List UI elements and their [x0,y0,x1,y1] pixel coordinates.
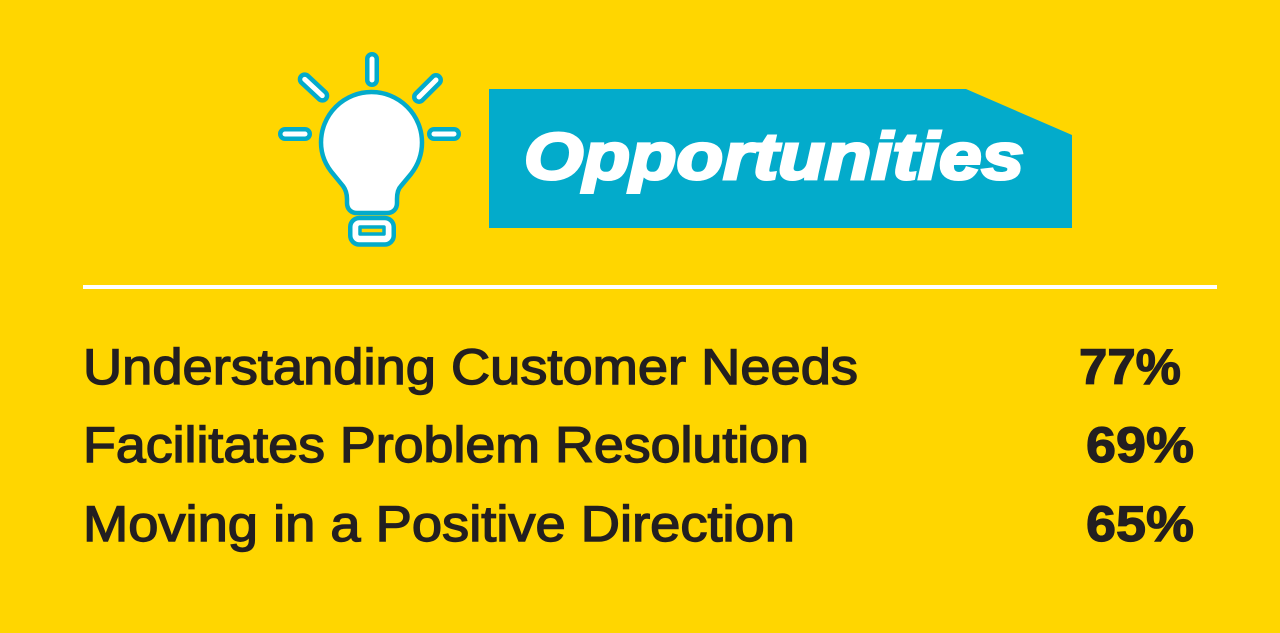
icon: light bulb [280,54,459,244]
heading banner [489,89,1072,228]
row: moving in a positive direction [83,496,1194,552]
icon: left ray [280,129,310,139]
row: facilitates problem resolution [83,417,1194,473]
icon: bulb glass [321,92,422,213]
row label: Understanding Customer Needs [83,339,858,395]
icon: bulb base slot [360,227,384,234]
banner shape [489,89,1072,228]
icon: upper right ray [412,73,443,104]
icon: right ray [429,129,459,139]
icon: upper left ray [298,73,329,102]
row: understanding customer needs [83,339,1181,395]
row value: 69% [1086,417,1194,473]
row label: Facilitates Problem Resolution [83,417,809,473]
row value: 65% [1086,496,1194,552]
row value: 77% [1079,339,1181,395]
row label: Moving in a Positive Direction [83,496,795,552]
icon: bulb base [350,218,394,244]
title: Opportunities [524,119,1024,193]
icon: top ray [367,54,377,85]
